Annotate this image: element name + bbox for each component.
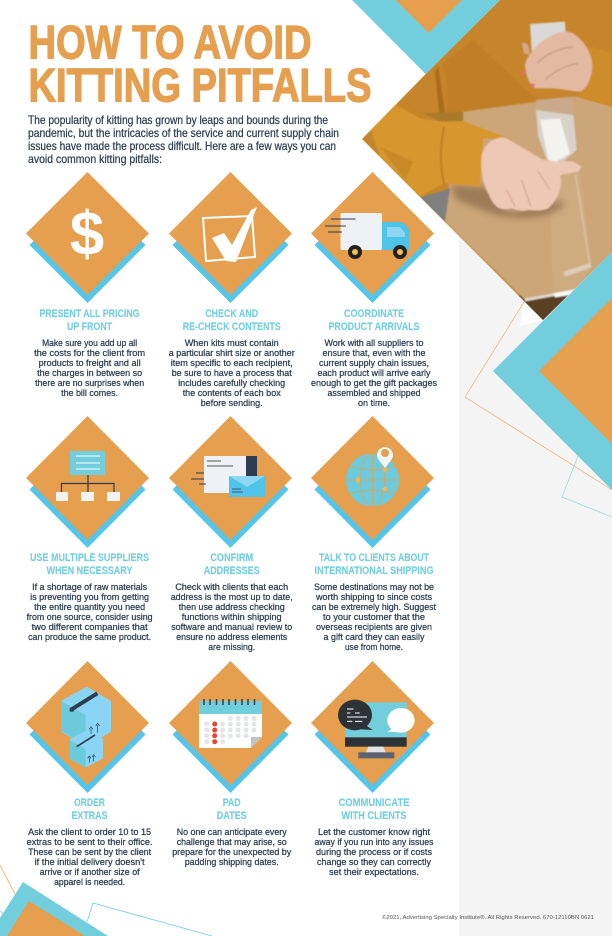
panel: present all pricing (26, 172, 149, 398)
grey floor (420, 188, 450, 222)
decorative corner: bottom left (0, 865, 212, 936)
dark floor under box (518, 294, 568, 320)
body text: is preventing you from getting (30, 591, 149, 602)
intro paragraph: avoid common kitting pitfalls: (28, 152, 162, 166)
body text: enough to get the gift packages (311, 377, 437, 388)
body text: overseas recipients are given (316, 621, 432, 632)
body text: then use address checking (179, 601, 285, 612)
body text: current supply chain issues, (319, 357, 429, 368)
body text: before sending. (201, 397, 263, 408)
sleeve (370, 103, 513, 197)
title: HOW TO AVOID (28, 16, 312, 68)
body text: the entire quantity you need (34, 601, 145, 612)
title: KITTING PITFALLS (28, 58, 372, 112)
body text: during the process or if costs (316, 846, 432, 857)
body text: No one can anticipate every (177, 826, 287, 837)
intro paragraph: The popularity of kitting has grown by leaps and bounds during the (28, 113, 328, 127)
heading: UP FRONT (67, 321, 112, 333)
body text: ensure no address elements (176, 631, 287, 642)
heading: RE-CHECK CONTENTS (183, 321, 281, 333)
body text: from one source, consider using (27, 611, 153, 622)
body text (27, 581, 153, 642)
body text: on time. (358, 397, 390, 408)
body text: away if you run into any issues (314, 836, 434, 847)
panel: use multiple suppliers (26, 416, 153, 642)
outline: right orange (465, 302, 612, 490)
heading: DATES (217, 810, 247, 822)
body text: the charges in between so (37, 367, 142, 378)
icon: monitor and speech bubbles diamond (311, 661, 434, 793)
body text: assembled and shipped (328, 387, 420, 398)
heading: INTERNATIONAL SHIPPING (314, 565, 434, 577)
body text: includes carefully checking (178, 377, 285, 388)
body text: Ask the client to order 10 to 15 (28, 826, 151, 837)
heading: PRESENT ALL PRICING (40, 308, 140, 320)
heading: COORDINATE (344, 308, 404, 320)
body text: Let the customer know right (318, 826, 430, 837)
body text: Work with all suppliers to (324, 337, 424, 348)
body text: ensure that, even with the (322, 347, 426, 358)
body text: a gift card they can easily (324, 631, 425, 642)
panel: coordinate product arrivals (311, 172, 437, 408)
heading: EXTRAS (72, 810, 108, 822)
body text: set their expectations. (329, 866, 419, 877)
body text: arrive or if another size of (40, 866, 140, 877)
panel: talk to clients about international shipping (311, 416, 436, 652)
panel: communicate with clients (311, 661, 434, 877)
icon: checkbox diamond (169, 172, 292, 303)
decorative diamond: right teal and orange (493, 252, 612, 490)
background panel: grey right column (459, 230, 612, 936)
panel: check and re-check contents (169, 172, 295, 408)
body text: padding shipping dates. (185, 856, 279, 867)
body text: Some destinations may not be (314, 581, 434, 592)
icon: hierarchy diamond (26, 416, 149, 548)
body text: functions within shipping (182, 611, 282, 622)
heading: WITH CLIENTS (342, 810, 407, 822)
heading (328, 308, 420, 333)
panel: pad dates (169, 661, 292, 867)
heading (40, 308, 140, 333)
body text: use from home. (345, 641, 403, 652)
body text: item specific to each recipient, (171, 357, 293, 368)
icon: mail diamond (169, 416, 292, 548)
body text: can produce the same product. (28, 631, 151, 642)
heading (183, 308, 281, 333)
intro paragraph: issues have made the process difficult. Here are a few ways you can (28, 139, 336, 153)
heading: PAD (223, 797, 241, 809)
body text (171, 581, 293, 652)
lower hand (481, 138, 582, 211)
body text: a particular shirt size or another (169, 347, 295, 358)
heading (217, 797, 247, 822)
body text: challenge that may arise, so (177, 836, 287, 847)
heading: CONFIRM (210, 552, 253, 564)
intro paragraph (28, 113, 339, 166)
heading: CHECK AND (205, 308, 258, 320)
icon: dollar sign diamond: $ (70, 200, 104, 269)
icon: dollar sign diamond (26, 172, 149, 303)
body text: products to freight and all (39, 357, 141, 368)
body text: are missing. (208, 641, 255, 652)
body text: be sure to have a process that (172, 367, 292, 378)
body text: These can be sent by the client (28, 846, 151, 857)
heading (314, 552, 434, 577)
body text: the bill comes. (61, 387, 118, 398)
heading: ORDER (74, 797, 105, 809)
body text (34, 337, 145, 398)
footer copyright: ©2021, Advertising Specialty Institute®. All Rights Reserved. 670-12110BN 0621 (382, 914, 594, 921)
heading: USE MULTIPLE SUPPLIERS (30, 552, 149, 564)
body text (312, 581, 436, 652)
heading (72, 797, 108, 822)
heading: PRODUCT ARRIVALS (328, 321, 420, 333)
heading: TALK TO CLIENTS ABOUT (319, 552, 429, 564)
icon: globe and pin diamond (311, 416, 434, 548)
body text: change so they can correctly (317, 856, 431, 867)
title (28, 16, 372, 112)
body text: software and manual review to (171, 621, 292, 632)
body text: the costs for the client from (34, 347, 145, 358)
photo: hands packing a cardboard box (362, 0, 612, 320)
heading: COMMUNICATE (338, 797, 410, 809)
body text (172, 826, 291, 867)
body text: there are no surprises when (35, 377, 144, 388)
box (445, 97, 612, 300)
body text (27, 826, 153, 887)
outline: right teal (562, 456, 612, 517)
intro paragraph: pandemic, but the intricacies of the service and current supply chain (28, 126, 339, 140)
body text: if the initial delivery doesn't (35, 856, 145, 867)
decorative chevron: top teal and orange (352, 0, 500, 74)
body text: address is the most up to date, (171, 591, 293, 602)
body text: When kits must contain (185, 337, 279, 348)
body text: extras to be sent to their office. (27, 836, 153, 847)
icon: stacked boxes diamond (26, 661, 149, 793)
body text: to your customer that the (323, 611, 425, 622)
body text: each product will arrive early (318, 367, 431, 378)
panel: order extras (26, 661, 153, 887)
body text: If a shortage of raw materials (32, 581, 147, 592)
body text: apparel is needed. (54, 876, 125, 887)
body text (169, 337, 295, 408)
body text (314, 826, 434, 877)
tape (536, 110, 577, 161)
panel: confirm addresses (169, 416, 293, 652)
body text: can be extremely high. Suggest (312, 601, 436, 612)
heading (30, 552, 149, 577)
body text: worth shipping to since costs (315, 591, 432, 602)
icon: delivery truck diamond (311, 172, 434, 303)
heading (204, 552, 260, 577)
body text (311, 337, 437, 408)
body text: two different companies that (32, 621, 148, 632)
heading: WHEN NECESSARY (46, 565, 133, 577)
heading: ADDRESSES (204, 565, 260, 577)
body text: the contents of each box (183, 387, 281, 398)
body text: Check with clients that each (175, 581, 288, 592)
icon: calendar diamond (169, 661, 292, 793)
heading (338, 797, 410, 822)
body text: prepare for the unexpected by (172, 846, 291, 857)
sweater behind arm (424, 112, 464, 122)
hand shadow (450, 185, 563, 218)
body text: Make sure you add up all (42, 337, 137, 348)
